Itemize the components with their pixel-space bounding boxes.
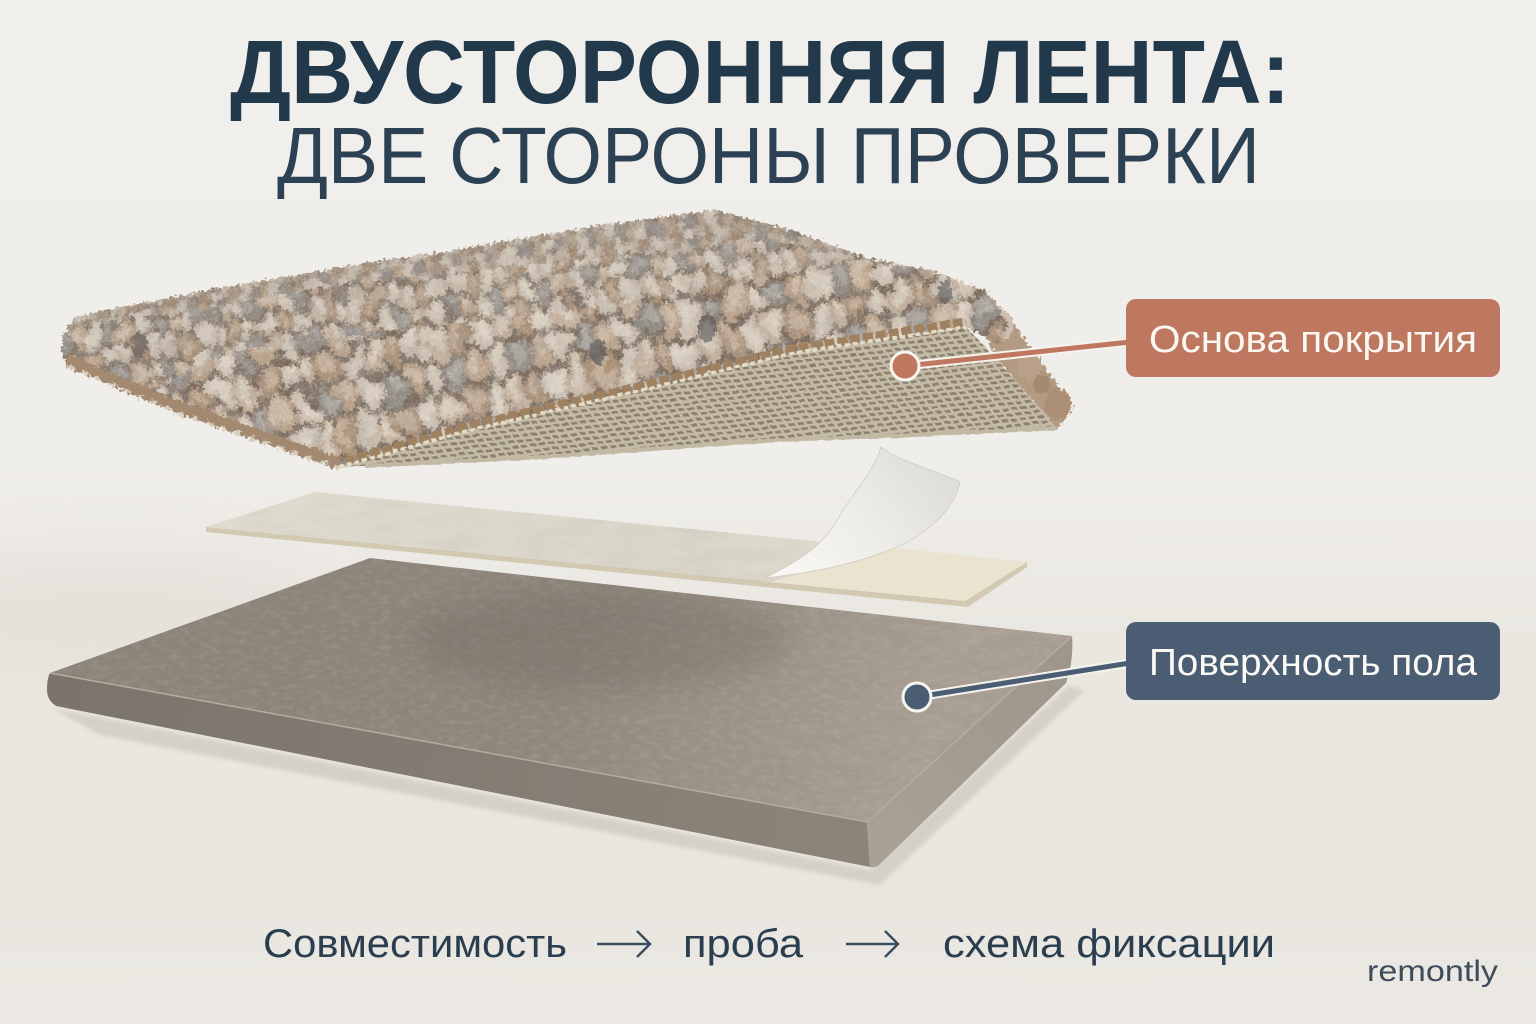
leader line (905, 342, 1130, 366)
process flow (263, 922, 1275, 966)
carpet front brown edge (66, 360, 340, 468)
pile mottling (61, 216, 1006, 454)
near pile (152, 260, 1009, 466)
floor sample slab (40, 550, 1085, 885)
brand mark: remontly (1367, 955, 1498, 988)
title line 1: ДВУСТОРОННЯЯ ЛЕНТА: (230, 23, 1290, 123)
marker dot (891, 352, 919, 380)
slab top face (50, 558, 1072, 822)
tape top face (206, 492, 1027, 601)
leader line (917, 663, 1130, 697)
middle pile (60, 239, 1008, 447)
carpet sample (60, 208, 1075, 470)
label box (1126, 299, 1500, 377)
tape edge thickness (206, 527, 1027, 607)
title line 2: ДВЕ СТОРОНЫ ПРОВЕРКИ (277, 111, 1260, 200)
backing fringe (345, 322, 966, 462)
tape texture (200, 480, 1040, 610)
slab front side (47, 673, 870, 867)
carpet backing (339, 327, 1057, 467)
ambient shadow on the surface (0, 565, 330, 655)
marker dot (903, 683, 931, 711)
step 2: проба (683, 922, 804, 966)
far pile (60, 208, 1008, 448)
arrow 1 (597, 931, 650, 957)
carpet pile (60, 208, 1009, 467)
peeled white liner (765, 447, 960, 578)
slab shadow (52, 686, 1085, 885)
slab edge highlight (50, 636, 1072, 822)
arrow 2 (846, 931, 898, 957)
exposed tape end (770, 548, 1027, 601)
step 1: Совместимость (263, 922, 567, 966)
adhesive tape strip (200, 447, 1040, 610)
carpet right fringe (960, 290, 1073, 430)
label box (1126, 622, 1500, 700)
label text: Основа покрытия (1149, 319, 1477, 361)
slab right side (867, 636, 1072, 867)
callout: floor surface (903, 622, 1500, 711)
dark grey tufts (132, 280, 952, 365)
title (230, 23, 1290, 200)
callout: carpet backing (891, 299, 1500, 380)
step 3: схема фиксации (943, 922, 1275, 966)
pile tonal veil (85, 240, 1008, 454)
label text: Поверхность пола (1149, 642, 1478, 684)
pile loose fibres (61, 210, 1008, 464)
slab texture (64, 559, 976, 808)
